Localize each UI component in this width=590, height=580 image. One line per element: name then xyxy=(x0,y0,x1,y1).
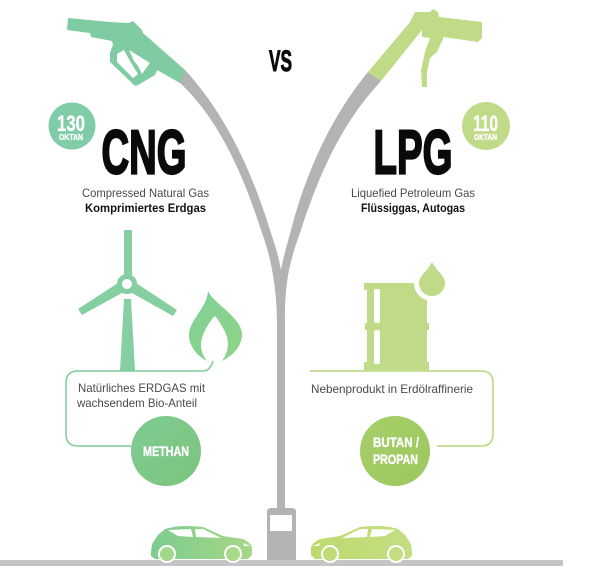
panel: butane propane callout: Nebenprodukt in Erdölraffinerie xyxy=(311,382,473,396)
text: LPG description: Liquefied Petroleum Gas xyxy=(351,186,475,200)
ground line xyxy=(0,560,563,566)
panel: butane propane callout xyxy=(310,371,493,486)
icon: oil barrel with drop xyxy=(364,262,450,370)
panel: methane callout: METHAN xyxy=(143,443,189,459)
badge: CNG octane: OKTAN xyxy=(59,132,83,142)
icon: right car xyxy=(311,526,412,562)
text: LPG description: Flüssiggas, Autogas xyxy=(361,201,465,215)
text: CNG description: Compressed Natural Gas xyxy=(82,186,209,200)
badge: CNG octane: 130 xyxy=(57,111,85,136)
icon: fuel pump xyxy=(267,508,296,560)
badge: LPG octane xyxy=(462,102,510,150)
badge: LPG octane: OKTAN xyxy=(474,132,497,142)
heading: VS: VS xyxy=(269,45,292,78)
panel: methane callout: Natürliches ERDGAS mit xyxy=(78,381,206,395)
icon: LPG fuel nozzle xyxy=(368,9,482,87)
badge: LPG octane: 110 xyxy=(473,111,498,136)
text: CNG description: Komprimiertes Erdgas xyxy=(85,201,206,215)
panel: butane propane callout: BUTAN / xyxy=(373,434,419,450)
panel: methane callout: wachsendem Bio-Anteil xyxy=(76,396,197,410)
icon: CNG fuel nozzle xyxy=(67,18,185,86)
panel: butane propane callout: PROPAN xyxy=(373,451,418,467)
heading: LPG: LPG xyxy=(374,118,452,188)
badge: CNG octane xyxy=(48,102,96,150)
text: CNG description xyxy=(82,186,209,215)
icon: left car xyxy=(151,526,252,562)
text: LPG description xyxy=(351,186,475,215)
panel: methane callout xyxy=(66,361,213,486)
icon: wind turbine xyxy=(78,230,177,371)
icon: flame xyxy=(189,291,242,361)
hose and stem xyxy=(178,70,381,512)
heading: CNG: CNG xyxy=(102,118,186,188)
